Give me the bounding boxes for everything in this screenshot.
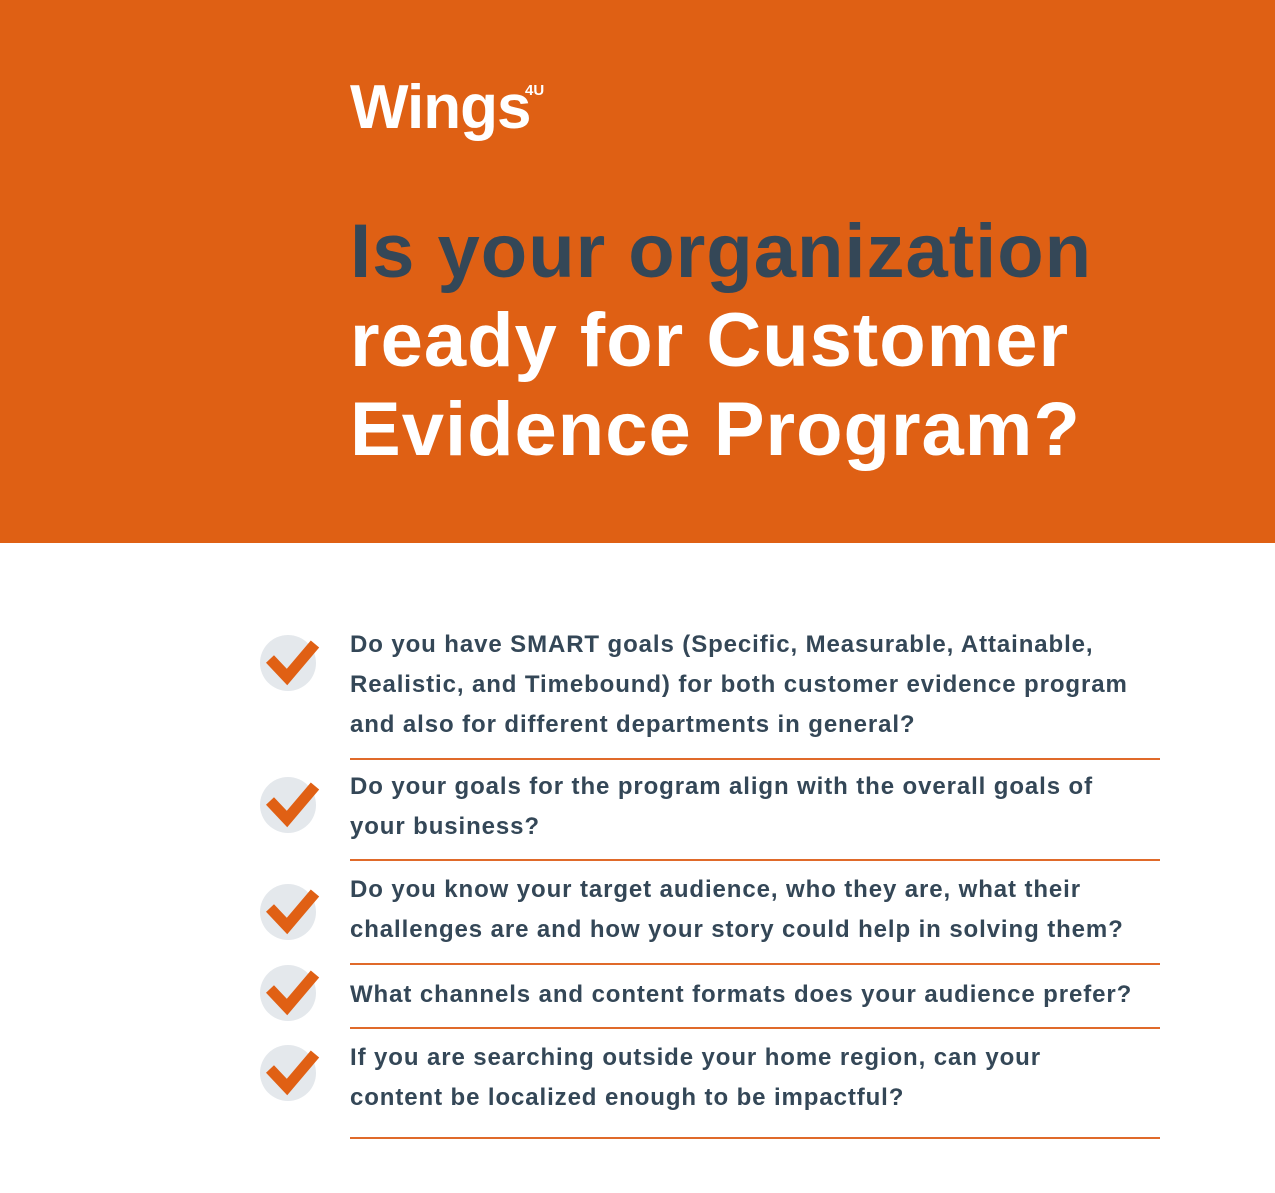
question 1: Realistic, and Timebound) for both customer evidence program (350, 671, 1128, 698)
question 1 (350, 631, 1128, 738)
icon: check 1 (260, 635, 320, 691)
question 5 (350, 1044, 1041, 1111)
icon: check 2 (260, 777, 320, 833)
question 5: If you are searching outside your home region, can your (350, 1044, 1041, 1071)
icon: check 5 (260, 1045, 320, 1101)
question 2: your business? (350, 813, 540, 840)
title: Evidence Program? (350, 387, 1081, 472)
question 2: Do your goals for the program align with the overall goals of (350, 773, 1093, 800)
header band: 4U (525, 82, 544, 99)
logo: Wings (350, 73, 530, 142)
question 5: content be localized enough to be impactful? (350, 1084, 904, 1111)
header band (0, 0, 1275, 543)
icon: check 4 (260, 965, 320, 1021)
title: Is your organization (350, 209, 1092, 294)
icon: check 3 (260, 884, 320, 940)
question 3 (350, 876, 1124, 943)
question 1: Do you have SMART goals (Specific, Measurable, Attainable, (350, 631, 1093, 658)
question 2 (350, 773, 1093, 840)
title (350, 209, 1092, 472)
question 4: What channels and content formats does your audience prefer? (350, 981, 1132, 1008)
question 1: and also for different departments in general? (350, 711, 916, 738)
title: ready for Customer (350, 298, 1069, 383)
question 3: Do you know your target audience, who they are, what their (350, 876, 1081, 903)
question 3: challenges are and how your story could help in solving them? (350, 916, 1124, 943)
